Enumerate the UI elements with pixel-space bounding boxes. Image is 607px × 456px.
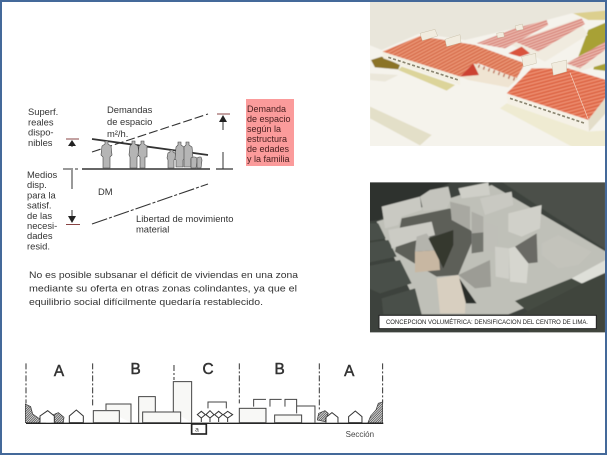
label: material freedom of movement: material bbox=[136, 224, 169, 234]
paper background bbox=[370, 14, 605, 146]
panel: space demand diagram bbox=[27, 99, 294, 251]
label: available means: resid. bbox=[27, 240, 50, 251]
trees bbox=[197, 411, 233, 422]
dark background bbox=[370, 182, 605, 332]
front blocks bbox=[495, 247, 509, 279]
roof ridge line bbox=[570, 73, 588, 119]
pink callout: de espacio bbox=[247, 114, 291, 124]
pink callout: según la bbox=[247, 124, 281, 134]
zone letters bbox=[54, 361, 355, 380]
label: available means: necesi- bbox=[27, 220, 57, 231]
panel: aerial watercolor of building complex bbox=[365, 0, 607, 150]
label: available real surface: dispo- bbox=[28, 127, 54, 138]
central connector bbox=[460, 63, 518, 87]
lower right facade bbox=[507, 94, 588, 132]
rear wings bbox=[508, 18, 588, 62]
label: available means: dades bbox=[27, 230, 53, 241]
block gaps bbox=[395, 208, 475, 277]
rear blocks bbox=[382, 197, 422, 228]
middle blocks bbox=[388, 222, 435, 248]
label: space demands: de espacio bbox=[107, 116, 152, 127]
label: available real surface: Superf. bbox=[28, 106, 58, 117]
zone letters: A bbox=[54, 363, 65, 380]
label: available means: disp. bbox=[27, 179, 47, 190]
body text paragraph: equilibrio social difícilmente quedaría restablecido. bbox=[29, 296, 263, 307]
main roof facade bbox=[382, 52, 460, 85]
main roof bbox=[382, 36, 525, 78]
caption box: CONCEPCION VOLUMÉTRICA: DENSIFICACION DEL CENTRO DE LIMA. bbox=[386, 319, 588, 326]
upper sky wash bbox=[365, 0, 607, 50]
ground line bbox=[26, 421, 383, 425]
label: available means: satisf. bbox=[27, 200, 52, 211]
building outlines bbox=[93, 382, 315, 423]
arrowheads bbox=[68, 115, 227, 223]
label: available means: de las bbox=[27, 210, 52, 221]
body text paragraph: No es posible subsanar el déficit de viviendas en una zona bbox=[29, 269, 299, 280]
caption box bbox=[379, 315, 596, 329]
label: available real surface: nibles bbox=[28, 137, 53, 148]
pink callout bbox=[246, 99, 294, 166]
label: available means: para la bbox=[27, 189, 56, 200]
houses bbox=[40, 410, 362, 423]
lower right fields bbox=[514, 278, 583, 310]
label: space demands: Demandas bbox=[107, 104, 153, 115]
pink callout: estructura bbox=[247, 134, 287, 144]
label: available real surface: reales bbox=[28, 116, 54, 127]
ground plane bbox=[377, 185, 607, 314]
panel: model photo of central Lima bbox=[370, 182, 605, 332]
pink callout: Demanda bbox=[247, 104, 286, 114]
label: space demands: m²/h. bbox=[107, 128, 128, 139]
left fields bbox=[370, 223, 386, 240]
ground yellow washes bbox=[573, 10, 607, 20]
facade windows bbox=[388, 57, 585, 123]
diagram lines and arrows bbox=[63, 114, 233, 224]
zone letters: B bbox=[131, 361, 141, 378]
body text paragraph: mediante su oferta en otras zonas colindantes, ya que el bbox=[29, 282, 297, 294]
zone dividers bbox=[26, 363, 383, 410]
people silhouettes bbox=[101, 141, 202, 168]
lower right roof bbox=[507, 68, 607, 120]
model scene bbox=[370, 182, 605, 332]
dark shrub bbox=[371, 57, 400, 69]
section label: Sección bbox=[346, 430, 374, 439]
zone letters: B bbox=[275, 361, 285, 378]
box letter: a bbox=[195, 426, 199, 433]
hatched vegetation bbox=[25, 402, 383, 423]
body text paragraph bbox=[29, 269, 299, 307]
underground box bbox=[192, 424, 206, 434]
zone letters: A bbox=[344, 363, 355, 380]
painted scene bbox=[365, 0, 607, 150]
label: DM: DM bbox=[98, 186, 113, 197]
chimneys bbox=[420, 24, 567, 75]
panel: section diagram A B C B A bbox=[25, 361, 383, 439]
zone letters: C bbox=[202, 361, 214, 378]
pink callout: y la familia bbox=[247, 154, 290, 164]
label: material freedom of movement: Libertad de movimiento bbox=[136, 213, 233, 224]
label: available means: Medios bbox=[27, 169, 58, 180]
pink callout: de edades bbox=[247, 144, 290, 154]
